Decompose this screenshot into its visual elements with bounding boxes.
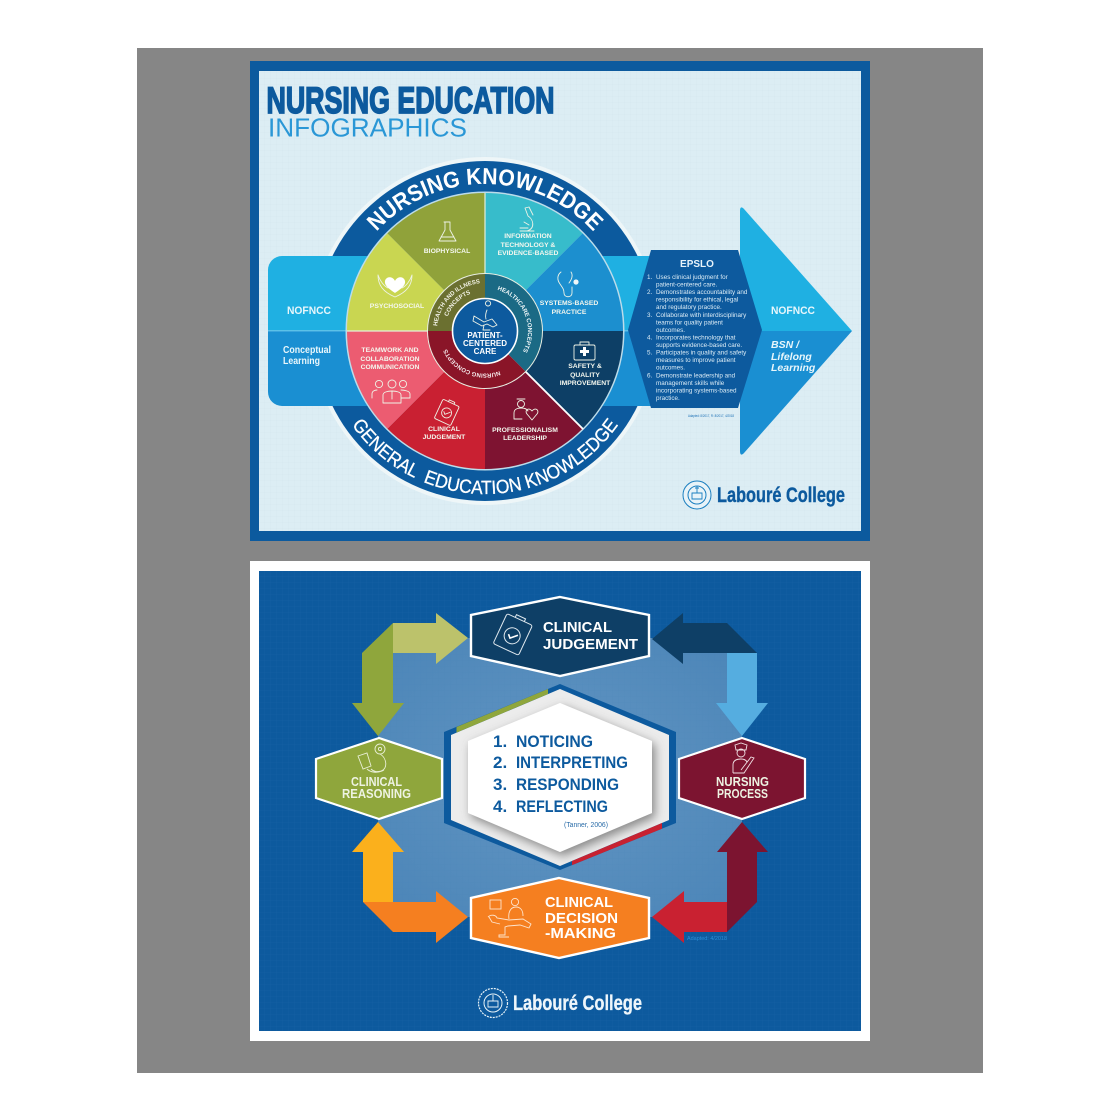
inner ring: concepts: NURSING CONCEPTS (444, 350, 500, 378)
input block: NOFNCC and conceptual learning: NOFNCC (287, 305, 331, 317)
segment label: safety and quality improvement (560, 342, 611, 387)
node: clinical decision-making: CLINICAL (545, 894, 613, 911)
panel: EPSLO outcomes: responsibility for ethical, legal (656, 297, 738, 304)
logo: Laboure College white (478, 988, 642, 1018)
segment label: safety and quality improvement: QUALITY (570, 372, 600, 379)
segment: clinical judgement (387, 331, 485, 469)
node: clinical reasoning: REASONING (342, 787, 411, 801)
segment label: systems-based practice (540, 272, 598, 316)
accent: red edge (572, 823, 662, 865)
segment label: information technology: TECHNOLOGY & (501, 242, 555, 249)
node: clinical reasoning: CLINICAL (351, 775, 402, 789)
node: clinical decision-making: DECISION (545, 910, 618, 927)
panel: EPSLO outcomes: outcomes. (656, 327, 685, 334)
arrow: judgement to process (652, 613, 768, 736)
node: nursing process: PROCESS (717, 787, 768, 801)
center: patient-centered care (452, 298, 518, 364)
segment: biophysical (387, 193, 485, 331)
segment label: biophysical (424, 222, 470, 255)
node: clinical judgement (471, 597, 649, 676)
segment label: safety and quality improvement: SAFETY & (568, 363, 602, 370)
segment label: biophysical: BIOPHYSICAL (424, 248, 470, 255)
arrow: outcomes: Learning (771, 362, 816, 374)
icon: clipboard (493, 611, 534, 655)
curved heading: general education knowledge: GENERAL EDUCATION KNOWLEDGE (354, 418, 618, 494)
icon: doctor and patient (488, 898, 531, 937)
segment label: professionalism leadership: LEADERSHIP (503, 435, 547, 442)
node: nursing process: NURSING (716, 775, 769, 789)
panel: EPSLO outcomes: Participates in quality and safety (656, 350, 747, 357)
panel: EPSLO outcomes: EPSLO (680, 259, 714, 270)
input block: NOFNCC and conceptual learning: Conceptual (283, 345, 331, 356)
node: clinical judgement: CLINICAL (543, 619, 612, 636)
list: four steps (493, 732, 628, 816)
segment label: information technology: EVIDENCE-BASED (498, 250, 558, 257)
segment label: psychosocial: PSYCHOSOCIAL (370, 303, 424, 310)
list: four steps: NOTICING (516, 732, 593, 751)
input block: NOFNCC and conceptual learning (268, 256, 700, 406)
panel: EPSLO outcomes: practice. (656, 395, 680, 402)
curved heading: nursing knowledge: NURSING KNOWLEDGE (366, 168, 604, 232)
outer ring: knowledge (311, 157, 659, 505)
gray backing (137, 48, 983, 1073)
segment: information technology (485, 193, 583, 331)
icon: nurse with syringe (733, 743, 754, 773)
accent: green edge (456, 689, 548, 733)
panel: EPSLO outcomes: patient-centered care. (656, 282, 718, 289)
panel: EPSLO outcomes: and regulatory practice. (656, 304, 722, 311)
arrow: outcomes (740, 207, 852, 455)
list: four steps: 3. (493, 775, 507, 794)
panel: EPSLO outcomes: 1. (647, 274, 653, 281)
panel: EPSLO outcomes: 5. (647, 350, 653, 357)
inner ring: concepts: CONCEPTS (444, 290, 470, 316)
panel: EPSLO outcomes: incorporating systems-based (656, 387, 737, 394)
logo: Laboure College white: Labouré College (513, 992, 642, 1015)
segment label: systems-based practice: PRACTICE (552, 309, 587, 316)
segment label: professionalism leadership (492, 399, 558, 442)
citation: (Tanner, 2006) (564, 822, 608, 829)
node: nursing process (679, 738, 805, 819)
list: four steps: 2. (493, 753, 507, 772)
label text: clinical judgement: CLINICAL (428, 426, 460, 433)
panel: clinical judgement model (250, 561, 870, 1041)
panel: EPSLO outcomes: Collaborate with interdisciplinary (656, 312, 747, 319)
segment label: safety and quality improvement: IMPROVEMENT (560, 380, 611, 387)
panel: EPSLO outcomes: management skills while (656, 380, 725, 387)
label text: clinical judgement: JUDGEMENT (423, 434, 466, 441)
panel: EPSLO outcomes: Demonstrates accountability and (656, 289, 748, 296)
arrow: reasoning to judgement (352, 613, 468, 736)
segment label: professionalism leadership: PROFESSIONALISM (492, 427, 558, 434)
segment label: teamwork: COMMUNICATION (361, 364, 419, 371)
panel: EPSLO outcomes: 2. (647, 289, 653, 296)
list: four steps: REFLECTING (516, 797, 608, 816)
panel: EPSLO outcomes: 6. (647, 372, 653, 379)
segment label: teamwork (360, 347, 420, 403)
list: four steps: INTERPRETING (516, 753, 628, 772)
node: clinical reasoning (316, 738, 442, 819)
list: four steps: 1. (493, 732, 507, 751)
segment: systems-based practice (485, 233, 623, 331)
input block: NOFNCC and conceptual learning: Learning (283, 356, 320, 367)
segment label: teamwork: TEAMWORK AND (361, 347, 419, 354)
panel: EPSLO outcomes: measures to improve patient (656, 357, 736, 364)
logo: Laboure College (683, 481, 845, 509)
title (266, 80, 554, 142)
label text: clinical judgement (423, 426, 466, 441)
segment label: psychosocial (370, 275, 424, 310)
arrow: outcomes: BSN / (771, 339, 800, 351)
title: NURSING EDUCATION (266, 80, 554, 121)
arrow: outcomes: NOFNCC (771, 305, 815, 317)
panel: EPSLO outcomes: 3. (647, 312, 653, 319)
segment: professionalism leadership (485, 331, 583, 469)
panel: EPSLO outcomes (628, 250, 762, 408)
segment: safety and quality (485, 331, 623, 429)
icon: blood pressure cuff (358, 744, 386, 772)
panel: EPSLO outcomes: teams for quality patient (656, 319, 723, 326)
wheel of competencies (346, 192, 624, 470)
inner ring: concepts: HEALTHCARE CONCEPTS (498, 286, 532, 353)
center: patient-centered care: PATIENT- (467, 331, 503, 340)
center panel: tanner model (444, 684, 676, 870)
inner ring: concepts (427, 273, 543, 389)
segment label: information technology: INFORMATION (504, 233, 552, 240)
node: clinical decision-making (471, 878, 649, 958)
panel: EPSLO outcomes: Uses clinical judgment for (656, 274, 728, 281)
segment label: systems-based practice: SYSTEMS-BASED (540, 300, 598, 307)
panel: EPSLO outcomes: outcomes. (656, 365, 685, 372)
center: patient-centered care: CARE (474, 347, 497, 356)
list: four steps: RESPONDING (516, 775, 619, 794)
segment icon: clinical judgement (434, 397, 460, 426)
title: INFOGRAPHICS (268, 112, 467, 142)
node: clinical judgement: JUDGEMENT (543, 636, 638, 653)
list: four steps: 4. (493, 797, 507, 816)
panel: EPSLO outcomes: Demonstrate leadership and (656, 372, 736, 379)
arrow: decision-making to reasoning (352, 822, 468, 943)
segment: psychosocial (347, 233, 485, 331)
node: clinical decision-making: -MAKING (545, 925, 616, 942)
panel: EPSLO outcomes: supports evidence-based care. (656, 342, 742, 349)
panel: nursing education infographics (250, 61, 870, 541)
inner ring: concepts: HEALTH AND ILLNESS (433, 279, 480, 326)
arrow: outcomes: Lifelong (771, 351, 812, 363)
adaptation note: Adapted: 8/2017, R: 8/2017, 4/2018 (688, 414, 734, 418)
adaptation date: Adapted: 4/2018 (687, 936, 727, 942)
segment: teamwork (347, 331, 485, 429)
segment label: teamwork: COLLABORATION (360, 356, 420, 363)
panel: EPSLO outcomes: 4. (647, 334, 653, 342)
center: patient-centered care: CENTERED (463, 339, 507, 348)
panel: EPSLO outcomes: Incorporates technology that (656, 334, 736, 342)
arrow: process to decision-making (652, 822, 768, 943)
logo: Laboure College: Labouré College (717, 484, 845, 507)
segment label: information technology (498, 207, 558, 257)
